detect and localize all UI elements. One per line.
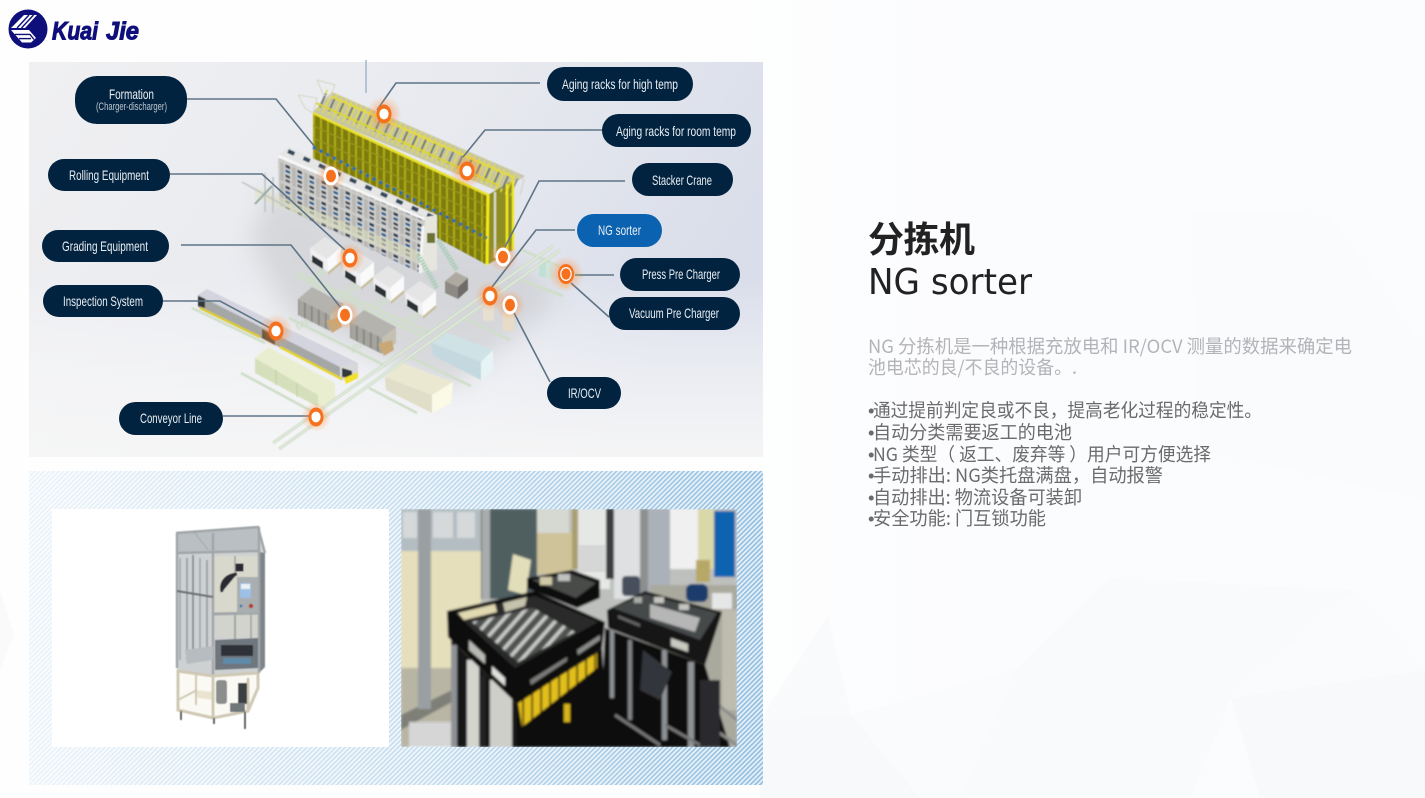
label: Formation: Formation — [109, 86, 154, 102]
title: Chinese: 分拣机 — [868, 211, 975, 263]
formation equipment — [255, 147, 437, 273]
panel: production line diagram — [29, 60, 763, 457]
conveyor branches — [192, 250, 583, 413]
front tray — [447, 591, 605, 704]
label: Aging racks for room temp: Aging racks for room temp — [616, 123, 736, 139]
label: Grading Equipment — [42, 230, 169, 262]
ground shadow — [250, 190, 560, 390]
leader lines — [163, 60, 625, 416]
label: Vacuum Pre Charger — [609, 297, 740, 330]
feature bullet list: • — [868, 487, 874, 508]
cream box — [385, 363, 453, 413]
pin: stacker crane — [488, 242, 518, 272]
feature bullet list: • — [868, 508, 874, 529]
label: Aging racks for high temp: Aging racks for high temp — [562, 76, 678, 92]
wall background — [401, 509, 737, 747]
feature bullet list: • — [868, 465, 874, 486]
back tray — [527, 570, 600, 608]
white charging boxes — [310, 237, 436, 319]
logo wordmark: Jie — [106, 18, 139, 46]
label: Grading Equipment: Grading Equipment — [62, 238, 148, 254]
main conveyor — [273, 246, 560, 449]
panel: hatched photo band — [29, 471, 763, 785]
intro paragraph: 池电芯的良/不良的设备。. — [868, 354, 1077, 380]
feature bullet list — [868, 397, 1262, 531]
stairs — [418, 240, 457, 288]
label: Formation — [75, 76, 187, 124]
feature bullet list: 手动排出: NG类托盘满盘，自动报警 — [873, 462, 1163, 488]
label: Rolling Equipment — [48, 159, 170, 191]
inspection tunnel — [198, 289, 358, 384]
feature bullet list: • — [868, 422, 874, 443]
label: Stacker Crane — [632, 163, 733, 196]
logo: Kuai Jie — [8, 10, 139, 48]
gantry frame — [242, 173, 285, 213]
pin: NG sorter — [475, 281, 505, 311]
pre charger units — [483, 261, 569, 331]
label: Rolling Equipment: Rolling Equipment — [69, 167, 149, 183]
feature bullet list: • — [868, 444, 874, 465]
title: English: NG sorter — [868, 262, 1032, 303]
equipment photo — [401, 509, 737, 747]
pin: grading — [330, 300, 360, 330]
label: Aging racks for room temp — [602, 114, 751, 147]
label: NG sorter highlighted — [577, 214, 662, 247]
feature bullet list: NG 类型（ 返工、废弃等 ）用户可方便选择 — [873, 441, 1211, 467]
intro paragraph — [868, 333, 1352, 380]
feature bullet list: 自动排出: 物流设备可装卸 — [873, 484, 1082, 510]
gray grading boxes — [298, 287, 396, 356]
label: Aging racks for high temp — [547, 67, 693, 101]
label: Inspection System: Inspection System — [63, 293, 143, 309]
illustration: battery factory line — [192, 80, 583, 449]
aging racks — [298, 80, 525, 265]
pin: aging high — [366, 96, 402, 132]
logo wordmark — [52, 18, 139, 46]
pin: IR/OCV — [495, 290, 525, 320]
pin: conveyor — [301, 402, 331, 432]
label: Press Pre Charger: Press Pre Charger — [642, 266, 720, 282]
gray cube — [445, 272, 468, 299]
illustration: sorter machine — [176, 527, 265, 729]
label: NG sorter highlighted: NG sorter — [598, 222, 641, 238]
feature bullet list: 自动分类需要返工的电池 — [873, 419, 1072, 445]
logo wordmark: Kuai — [52, 18, 99, 46]
feature bullet list: • — [868, 400, 874, 421]
pin: inspection — [259, 314, 293, 348]
right tray — [607, 591, 722, 665]
label: IR/OCV — [547, 377, 621, 409]
icon: logo emblem — [8, 10, 48, 48]
location pins — [259, 96, 584, 432]
pin: rolling — [335, 243, 365, 273]
feature bullet list: 通过提前判定良或不良，提高老化过程的稳定性。 — [873, 397, 1262, 423]
label: Conveyor Line: Conveyor Line — [140, 410, 202, 426]
pin: formation — [316, 161, 346, 191]
label: Vacuum Pre Charger: Vacuum Pre Charger — [629, 305, 719, 321]
pin: pre charger — [548, 256, 584, 292]
label: Formation: (Charger-discharger) — [96, 101, 167, 113]
label: Conveyor Line — [119, 402, 223, 435]
green box — [255, 347, 335, 407]
label: Stacker Crane: Stacker Crane — [652, 172, 712, 188]
intro paragraph: NG 分拣机是一种根据充放电和 IR/OCV 测量的数据来确定电 — [868, 333, 1352, 359]
blue box — [432, 333, 493, 380]
label: Press Pre Charger — [620, 258, 740, 291]
feature bullet list: 安全功能: 门互锁功能 — [873, 505, 1046, 531]
product photo card — [52, 509, 389, 747]
lower machine bases — [451, 628, 737, 747]
pin: aging room — [450, 154, 484, 188]
label: Inspection System — [43, 285, 163, 317]
label: IR/OCV: IR/OCV — [568, 385, 601, 401]
